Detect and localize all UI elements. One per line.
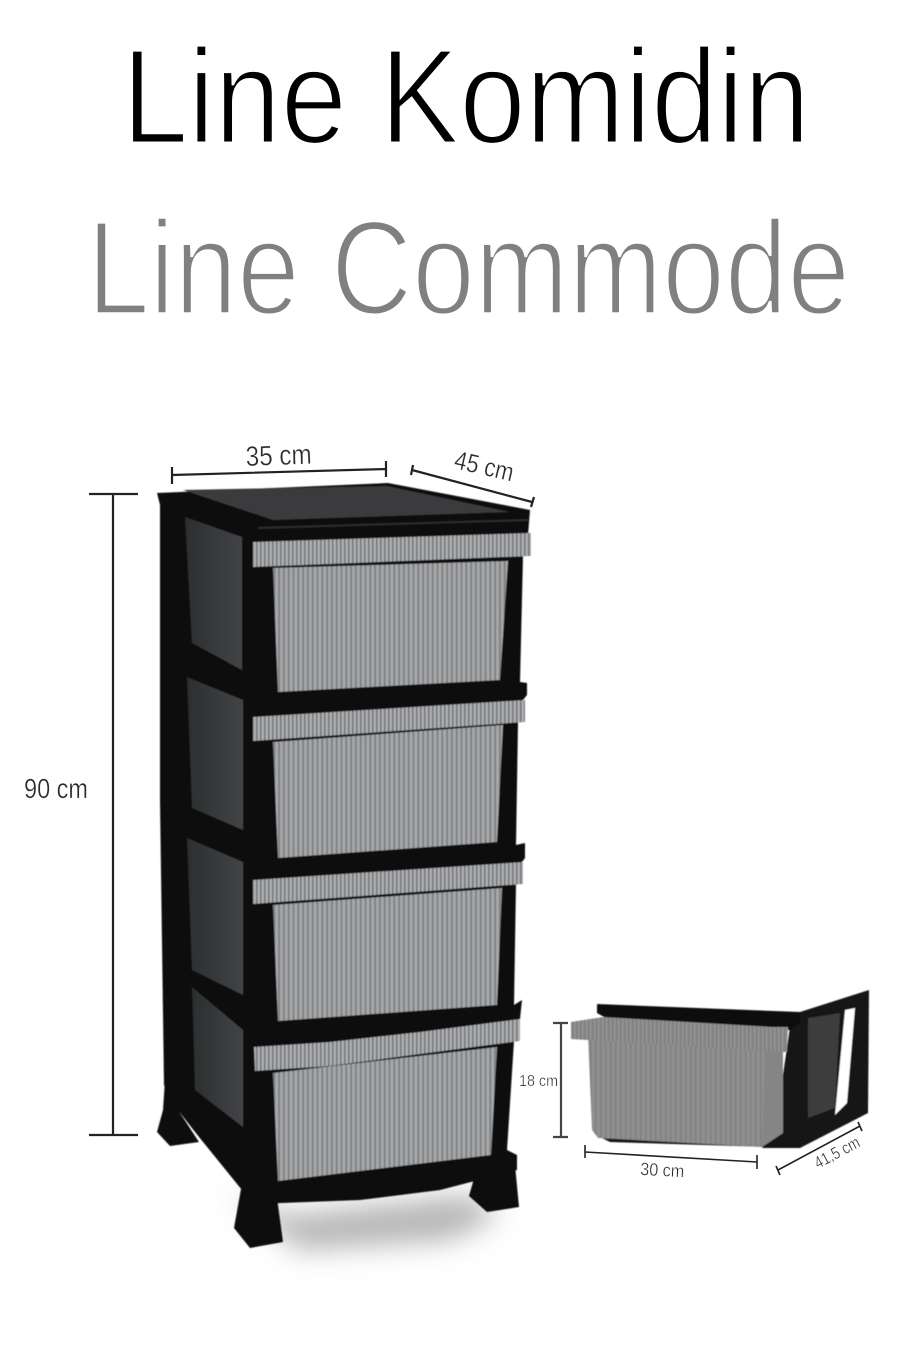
open frame: [762, 990, 869, 1148]
side panels: [185, 517, 243, 1127]
drawer body: [588, 1034, 783, 1147]
dimension: 35 cm: 35 cm: [245, 439, 312, 472]
drawer body side: [762, 1048, 783, 1147]
dimension: 90 cm: 90 cm: [24, 773, 88, 804]
top panel: [183, 486, 528, 529]
small drawer unit: [571, 990, 869, 1148]
dimension: 18 cm: [519, 1023, 568, 1137]
drawer 1: [253, 533, 531, 692]
dimension: 30 cm: [585, 1145, 757, 1181]
black frame: [157, 483, 530, 1204]
dimension: 90 cm: [24, 494, 138, 1135]
frame window: [835, 1008, 855, 1115]
dimension: 45 cm: 45 cm: [452, 445, 517, 487]
title: Line Komidin: Line Komidin: [122, 21, 810, 172]
drawer 3: [253, 862, 523, 1021]
front right foot: [469, 1165, 519, 1212]
drawer 2: [253, 700, 525, 858]
dimension: 30 cm: 30 cm: [640, 1159, 685, 1181]
floor shadow: [230, 1195, 500, 1250]
dimension: 45 cm: [411, 445, 534, 507]
dimension: 41,5 cm: [776, 1122, 863, 1175]
commode: four drawer unit: [157, 483, 531, 1248]
drawer 4: [254, 1019, 520, 1181]
top rail: [597, 1004, 800, 1030]
back left foot: [157, 1080, 199, 1146]
dimension: 18 cm: 18 cm: [519, 1073, 558, 1090]
drawer rim: [571, 1017, 788, 1052]
bottom rail: [598, 1136, 770, 1147]
frame side panel: [808, 1013, 840, 1118]
front left foot: [234, 1178, 283, 1248]
dimension: 35 cm: [172, 439, 386, 484]
dimension: 41,5 cm: 41,5 cm: [811, 1133, 863, 1173]
